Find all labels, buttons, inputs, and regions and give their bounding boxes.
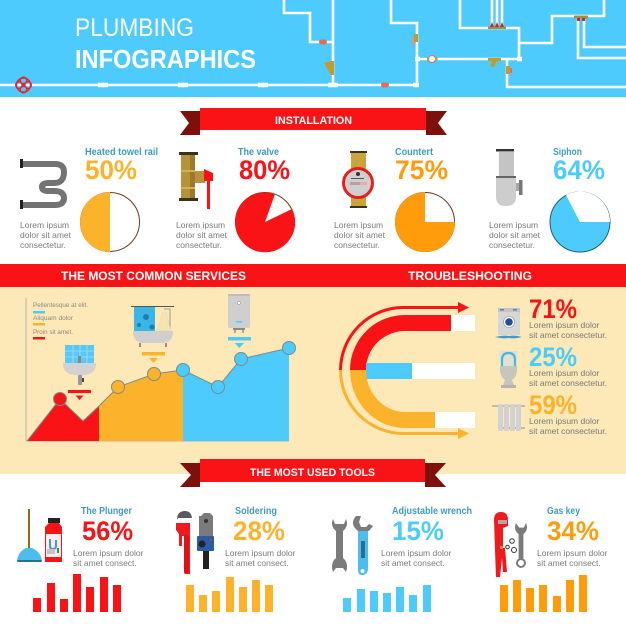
- area: orange: [99, 370, 183, 441]
- heading: services: THE MOST COMMON SERVICES: [61, 269, 246, 283]
- arc: orange 59%: [358, 370, 435, 420]
- title: PLUMBING: [75, 14, 194, 42]
- description: sit amet consectetur.: [529, 378, 607, 388]
- icon: pipe wrench: [176, 511, 192, 574]
- area: blue: [183, 348, 289, 441]
- description: sit amet consect.: [225, 558, 289, 568]
- area: red: [27, 399, 99, 441]
- line and markers: [27, 342, 296, 441]
- chart: services area chart: [26, 294, 296, 441]
- panel: siphon: [489, 147, 610, 252]
- panel: adjustable wrench: [332, 506, 472, 612]
- pie chart 64%: [550, 192, 610, 252]
- troubleshooting item: washer: [495, 294, 607, 340]
- description: sit amet consect.: [537, 558, 601, 568]
- panel: counter: [334, 147, 455, 252]
- icon: siphon: [496, 149, 522, 206]
- chart: troubleshooting arc bars: [340, 302, 475, 439]
- description: dolor sit amet: [176, 230, 228, 240]
- section header band: [0, 264, 626, 287]
- bar chart: [500, 575, 587, 612]
- icon: drain cleaner bottle: [45, 518, 62, 562]
- description: consectetur.: [334, 240, 380, 250]
- percentage: 50%: [85, 155, 137, 185]
- description: Lorem ipsum dolor: [537, 548, 608, 558]
- panel: the plunger: [17, 506, 144, 612]
- description: consectetur.: [489, 240, 535, 250]
- icon: valve: [179, 152, 213, 209]
- description: Lorem ipsum dolor: [225, 548, 296, 558]
- label: Siphon: [553, 147, 582, 158]
- label: The Plunger: [81, 506, 132, 517]
- white tracks: [412, 315, 475, 428]
- label: Gas key: [547, 506, 580, 517]
- description: sit amet consect.: [73, 558, 137, 568]
- description: consectetur.: [176, 240, 222, 250]
- description: sit amet consect.: [381, 558, 445, 568]
- icon: soldering iron: [197, 513, 214, 569]
- icon: spanner: [332, 519, 347, 572]
- icon: washing machine: [495, 308, 522, 338]
- troubleshooting item: radiator: [492, 390, 607, 436]
- description: dolor sit amet: [489, 230, 541, 240]
- icon: plunger: [17, 509, 42, 562]
- description: Lorem ipsum dolor: [529, 320, 600, 330]
- bar: blue 25%: [366, 363, 412, 379]
- icon: towel rail: [20, 159, 64, 209]
- panel: heated towel rail: [20, 147, 158, 252]
- ribbon heading: installation: [180, 108, 447, 135]
- legend: Proin sit amet.: [33, 330, 73, 336]
- panel: gas key: [494, 506, 608, 612]
- percentage: 25%: [529, 342, 577, 372]
- marker: orange: [142, 352, 165, 363]
- description: Lorem ipsum dolor: [529, 416, 600, 426]
- panel: the valve: [176, 147, 295, 252]
- percentage: 64%: [553, 155, 605, 185]
- label: Adjustable wrench: [392, 506, 472, 517]
- marker: blue: [228, 337, 251, 348]
- percentage: 28%: [233, 516, 285, 546]
- bar chart: [33, 574, 121, 612]
- label: Heated towel rail: [85, 147, 158, 158]
- pie chart 50%: [80, 192, 140, 252]
- bar chart: [343, 585, 431, 612]
- percentage: 56%: [82, 516, 133, 546]
- icon: water heater: [228, 294, 250, 333]
- description: Lorem ipsum dolor: [529, 368, 600, 378]
- label: Soldering: [235, 506, 277, 517]
- arc: red 71%: [358, 323, 451, 370]
- description: sit amet consectetur.: [529, 426, 607, 436]
- percentage: 75%: [395, 155, 448, 185]
- icon: red wheel valve: [16, 77, 31, 93]
- arrow: orange: [340, 370, 469, 439]
- percentage: 59%: [529, 390, 577, 420]
- legend: Pellentesque at elit.: [33, 303, 88, 309]
- description: sit amet consectetur.: [529, 330, 607, 340]
- arrow: red: [340, 302, 469, 370]
- title: INFOGRAPHICS: [75, 44, 256, 74]
- panel: beige background: [0, 287, 626, 474]
- ribbon heading: installation: INSTALLATION: [275, 115, 352, 127]
- title: [75, 14, 256, 74]
- icon: small spanner: [515, 524, 527, 567]
- icon: water meter: [344, 151, 372, 208]
- description: Lorem ipsum: [334, 220, 383, 230]
- percentage: 71%: [529, 294, 577, 324]
- bar chart: [186, 577, 273, 612]
- icon: adjustable wrench: [353, 516, 373, 575]
- label: Countert: [395, 147, 434, 158]
- icon: bath: [131, 306, 174, 347]
- description: Lorem ipsum dolor: [73, 548, 144, 558]
- legend: Aliquam dolor: [33, 316, 73, 322]
- ribbon heading: tools: THE MOST USED TOOLS: [250, 467, 375, 479]
- icon: sink: [63, 345, 96, 385]
- percentage: 15%: [392, 516, 444, 546]
- description: consectetur.: [20, 240, 66, 250]
- marker: red: [68, 390, 91, 400]
- icon: washer rings: [506, 539, 516, 552]
- icon: red gas wrench: [494, 512, 508, 577]
- description: Lorem ipsum: [489, 220, 538, 230]
- description: Lorem ipsum: [20, 220, 69, 230]
- icon: pipe fittings: [319, 16, 588, 88]
- icon: radiator: [492, 404, 525, 431]
- percentage: 34%: [547, 516, 599, 546]
- troubleshooting item: toilet: [499, 342, 607, 388]
- label: The valve: [238, 147, 279, 158]
- legend: [33, 303, 88, 340]
- header banner: [0, 0, 626, 97]
- pipe network: [0, 0, 626, 87]
- pie chart 75%: [395, 192, 455, 252]
- icon: toilet: [499, 351, 518, 388]
- description: dolor sit amet: [334, 230, 386, 240]
- description: Lorem ipsum dolor: [381, 548, 452, 558]
- ribbon heading: tools: [180, 459, 446, 487]
- panel: soldering: [176, 506, 296, 612]
- pie chart 80%: [235, 192, 295, 252]
- description: Lorem ipsum: [176, 220, 225, 230]
- description: dolor sit amet: [20, 230, 72, 240]
- percentage: 80%: [239, 155, 290, 185]
- heading: troubleshooting: TROUBLESHOOTING: [408, 269, 532, 283]
